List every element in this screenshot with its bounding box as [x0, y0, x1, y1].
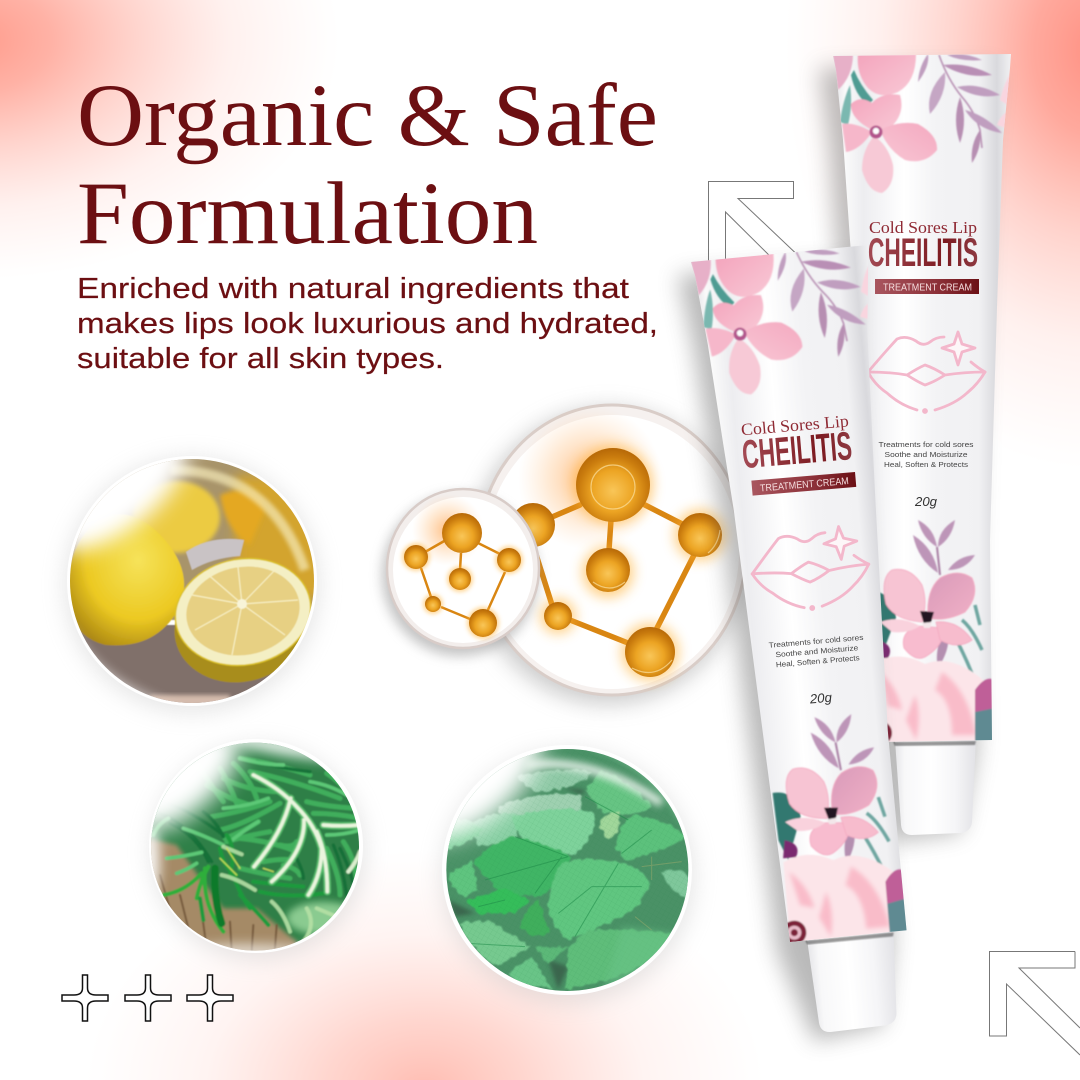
front tube label: Soothe and Moisturize	[775, 643, 859, 659]
back tube label: Heal, Soften & Protects	[884, 460, 968, 469]
heading: Formulation	[77, 165, 538, 263]
front tube lips icon	[749, 524, 872, 614]
arrow outline: upper	[708, 182, 805, 268]
lemon balm photo circle	[436, 744, 700, 1007]
large molecule circle	[470, 404, 747, 704]
back tube label: 20g	[914, 494, 938, 509]
front tube label: 20g	[808, 690, 833, 707]
front tube body	[691, 245, 926, 946]
small molecule circle	[382, 489, 539, 656]
front tube label: Cold Sores Lip	[740, 411, 850, 439]
body text: suitable for all skin types.	[77, 343, 444, 375]
arrow outline: lower right	[990, 952, 1080, 1055]
back tube label: Treatments for cold sores	[878, 440, 974, 449]
body text	[77, 273, 658, 375]
back tube label	[868, 218, 979, 509]
front tube label: CHEILITIS	[740, 424, 854, 477]
front tube cap	[807, 929, 902, 1033]
back tube label: TREATMENT CREAM	[883, 282, 972, 294]
rosemary photo circle	[146, 742, 370, 964]
front tube label: TREATMENT CREAM	[760, 476, 849, 494]
back tube artwork	[833, 54, 1012, 745]
front tube label	[739, 411, 874, 710]
back tube cap	[895, 738, 976, 835]
large molecule spheres	[511, 445, 726, 681]
lemon photo circle	[60, 452, 324, 717]
body text: Enriched with natural ingredients that	[77, 273, 629, 305]
front product tube	[677, 245, 935, 1047]
back tube body	[833, 54, 1011, 742]
back product tube	[819, 54, 1012, 843]
body text: makes lips look luxurious and hydrated,	[77, 308, 658, 340]
front tube label: Heal, Soften & Protects	[775, 653, 860, 669]
back tube label: Soothe and Moisturize	[884, 450, 968, 459]
heading: Organic & Safe	[77, 67, 658, 165]
back tube lips icon	[868, 332, 985, 412]
sparkle icons	[62, 975, 233, 1021]
back tube label: Cold Sores Lip	[869, 218, 977, 237]
front tube label: Treatments for cold sores	[768, 633, 864, 650]
front tube artwork	[691, 249, 906, 942]
back tube label: CHEILITIS	[868, 231, 978, 275]
small molecule bonds	[421, 540, 505, 619]
small molecule spheres	[402, 513, 523, 639]
heading	[77, 67, 658, 263]
large molecule bonds	[533, 505, 694, 643]
